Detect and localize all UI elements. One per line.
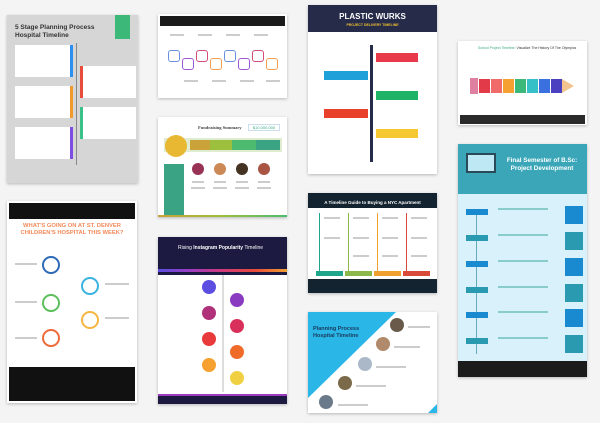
progress bar [164,138,282,152]
monitor icon [466,153,496,173]
stage banners [376,53,418,62]
card: NYC apartment [308,193,437,293]
title: Hospital Timeline [313,333,358,339]
title: A Timeline Guide to Buying a NYC Apartment [324,200,421,205]
heading: WHAT'S GOING ON AT ST. DENVER CHILDREN'S HOSPITAL THIS WEEK? [21,223,123,236]
title: School Project Timeline: Visualize The History Of The Olympics [478,46,576,50]
title [15,24,94,39]
card: St Denver hospital [7,201,137,403]
icon circles [42,256,60,274]
columns [319,213,320,271]
photos [390,318,404,332]
stage boxes [15,45,73,77]
card: final semester [458,144,587,377]
card: planning process blue [308,312,437,413]
title: Fundraising Summary [198,125,242,130]
pencil [470,78,574,94]
badge [115,15,130,39]
card: Olympics pencil [458,41,587,125]
title: Final Semester of B.Sc: Project Development [507,157,577,172]
card: hexagon event timeline [158,14,287,98]
title: Hospital Timeline [15,32,69,39]
icon squares [565,206,583,224]
title: 5 Stage Planning Process [15,24,94,31]
title: PLASTIC WURKS [339,12,406,21]
card: fundraising summary: $10,000,000 [253,125,275,130]
card: Plastic Wurks [308,5,437,174]
title: Planning Process [313,326,359,332]
card: Plastic Wurks: PROJECT DELIVERY TIMELINE [346,23,399,27]
card: fundraising summary [158,117,287,217]
card: Instagram timeline [158,237,287,404]
year circles [202,280,216,294]
title: Rising Instagram Popularity Timeline [178,245,263,251]
card: 5 stage hospital timeline [7,15,138,183]
hexagon icons [168,50,278,70]
week labels [466,209,488,215]
title [313,326,359,339]
